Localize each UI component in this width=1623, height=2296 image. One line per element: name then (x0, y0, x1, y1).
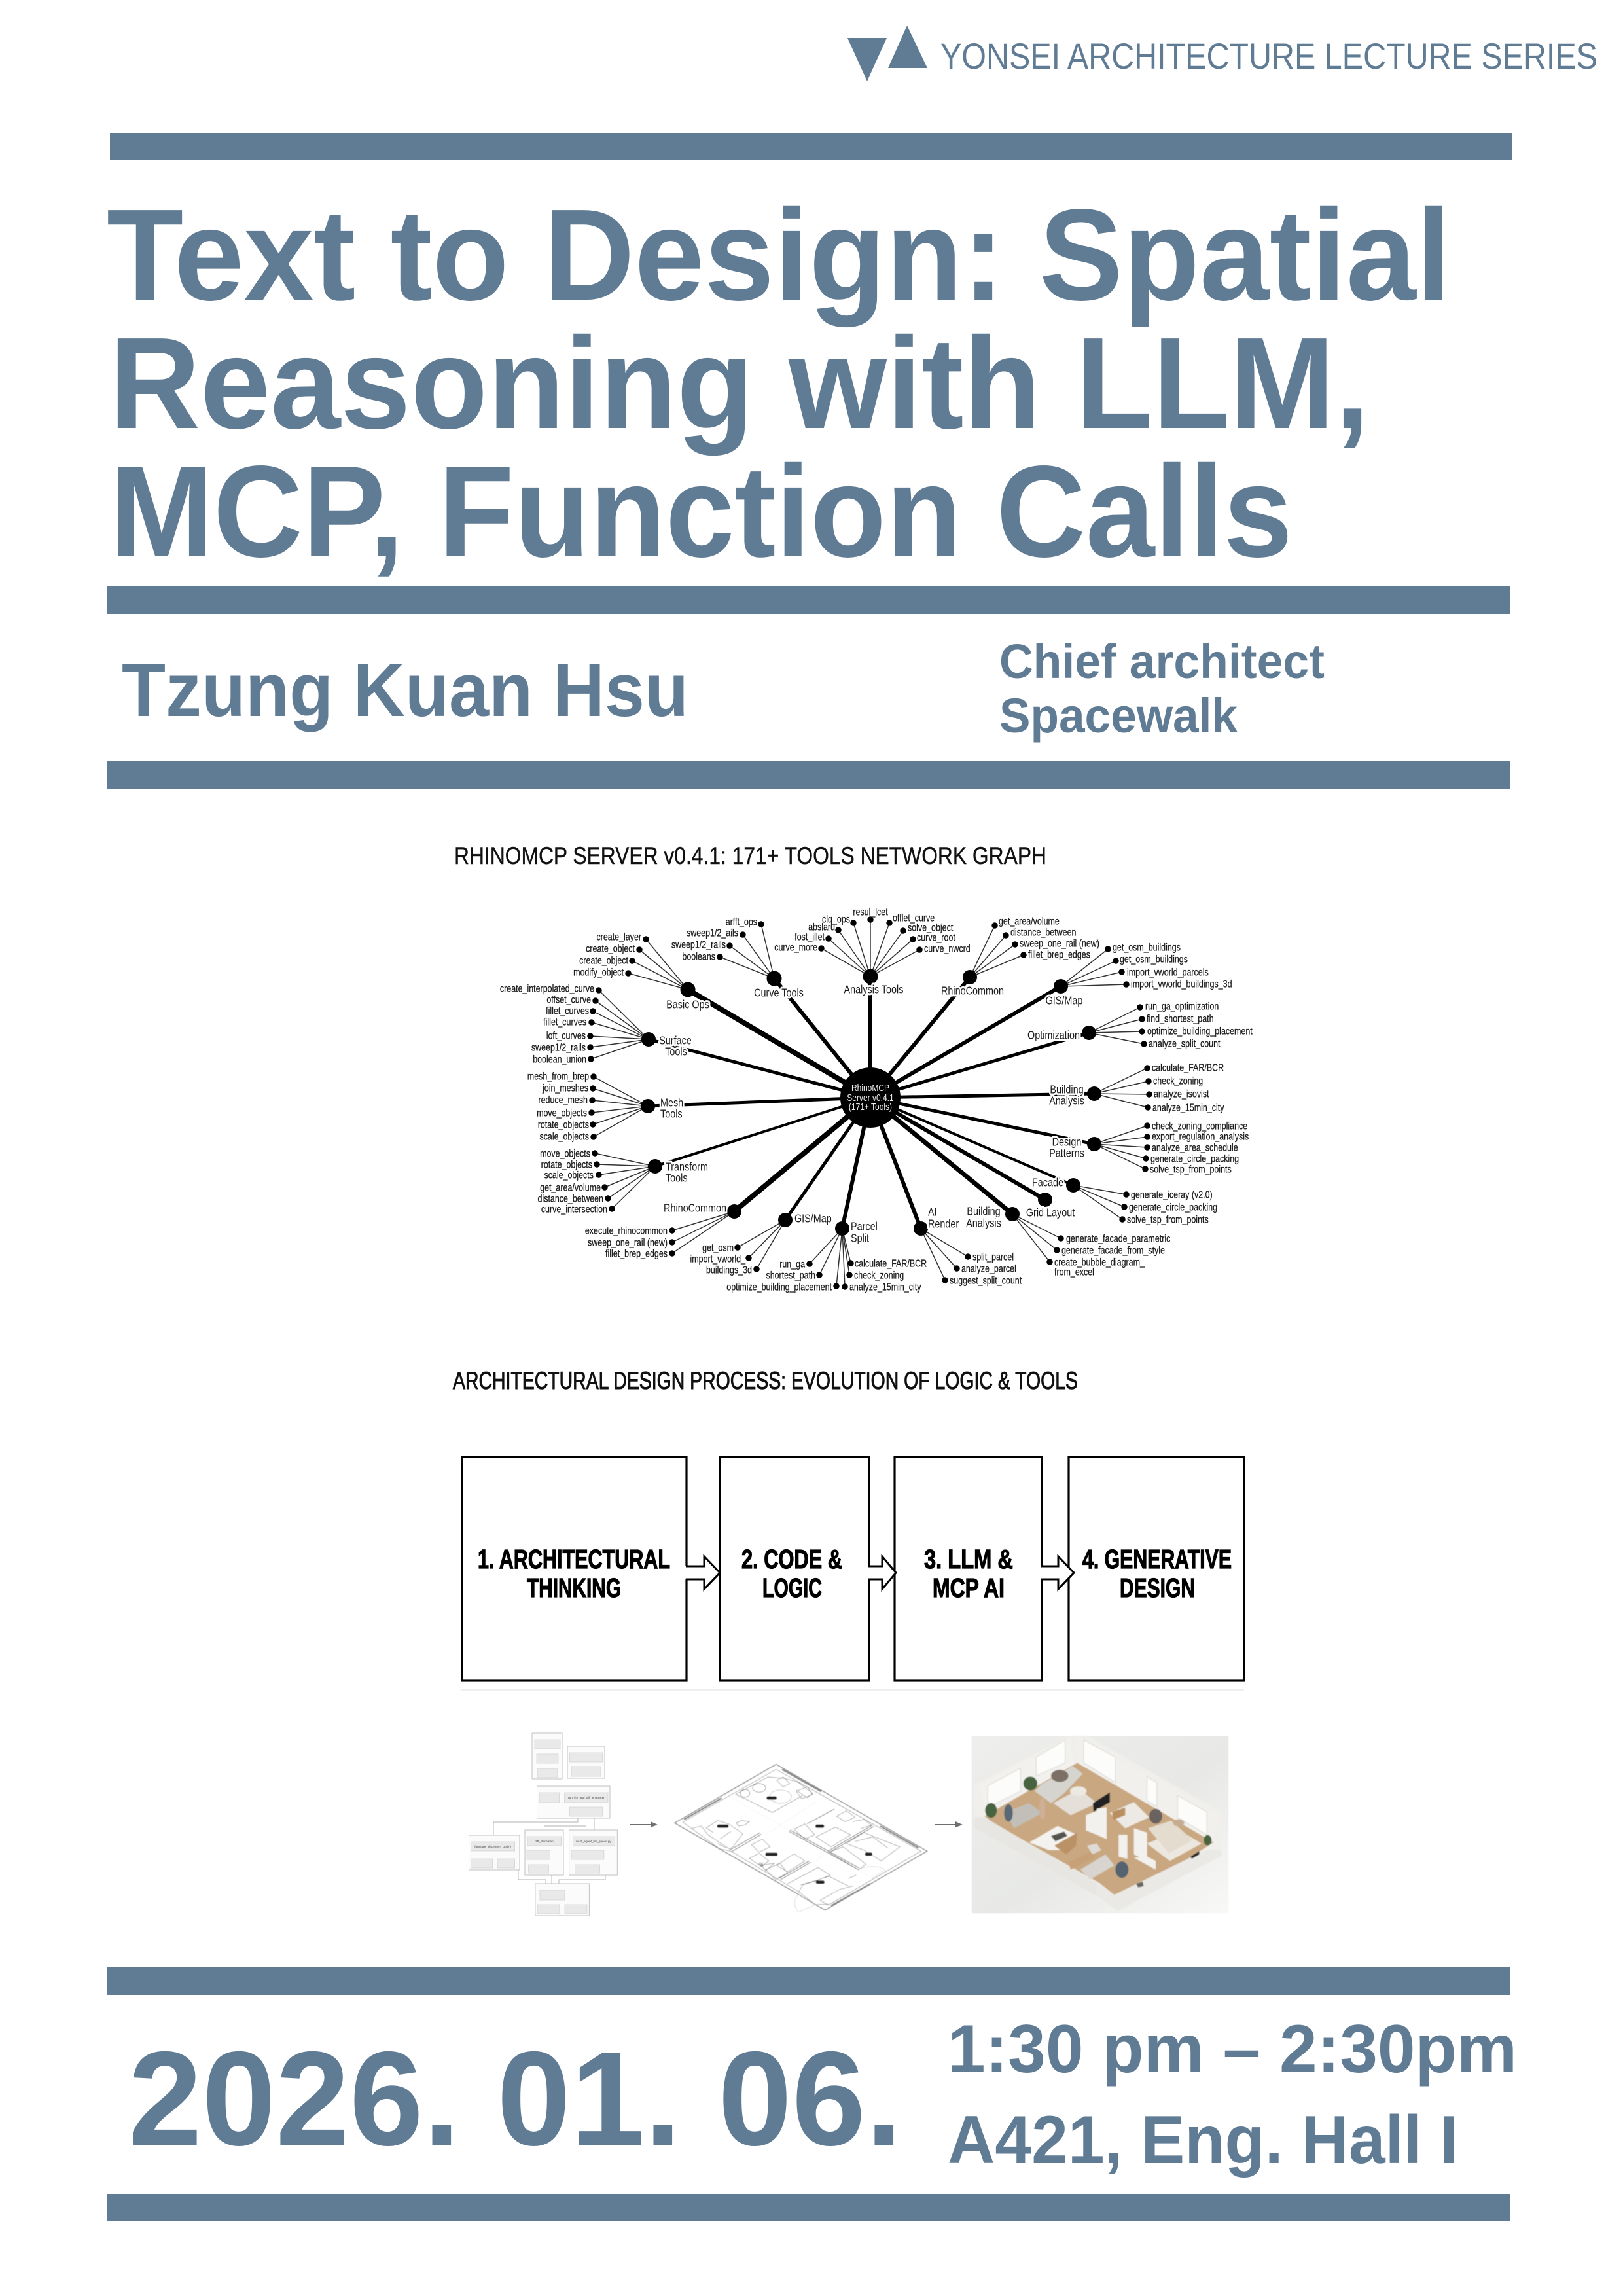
cluster: RhinoCommon top: get_area/volume (999, 915, 1060, 927)
flow panel: LLM (569, 1830, 617, 1875)
cluster: Facade: generate_circle_packing (1129, 1201, 1217, 1213)
cluster: Building Analysis bottom: generate_facade_parametric (1066, 1232, 1170, 1244)
cluster: Parcel Split: run_ga (779, 1258, 805, 1270)
flow panel: output (535, 1884, 589, 1916)
cluster: Analysis Tools: solve_object (908, 922, 953, 933)
bar under speaker (107, 761, 1510, 789)
cluster: Building Analysis right: analyze_15min_city (1152, 1102, 1224, 1113)
cluster: Optimization: optimize_building_placement (1147, 1025, 1253, 1037)
cluster: GIS/Map bottom: GIS/Map (794, 1212, 832, 1225)
cluster: Basic Ops: create_object (579, 954, 628, 966)
cluster: RhinoCommon bottom: RhinoCommon (664, 1202, 726, 1215)
time and venue (948, 2011, 1517, 2178)
bar under title (107, 586, 1510, 614)
cluster: Design Patterns: solve_tsp_from_points (1150, 1163, 1232, 1175)
flow panel: differential placement (525, 1830, 563, 1875)
render living area (1053, 1789, 1097, 1815)
title: Text to Design: Spatial (107, 183, 1451, 328)
flow panel: preprocessing (532, 1733, 562, 1779)
title: Reasoning with LLM, (109, 311, 1370, 456)
cluster: Surface Tools: fillet_curves (543, 1016, 586, 1028)
cluster: Design Patterns: Patterns (1049, 1147, 1084, 1160)
cluster: RhinoCommon top: fillet_brep_edges (1028, 948, 1090, 960)
cluster: Curve Tools: booleans (682, 950, 715, 962)
cluster: Surface Tools: Tools (665, 1045, 687, 1058)
cluster: AI Render (914, 1206, 1022, 1286)
cluster: Design Patterns (1049, 1120, 1249, 1175)
cluster: RhinoCommon bottom: execute_rhinocommon (585, 1225, 668, 1236)
cluster: GIS/Map bottom (690, 1212, 832, 1276)
cluster: Mesh Tools: mesh_from_brep (527, 1070, 589, 1082)
speaker role (999, 634, 1325, 743)
isometric floor plan (675, 1765, 927, 1912)
cluster: Mesh Tools: join_meshes (542, 1082, 588, 1094)
cluster: Optimization: run_ga_optimization (1145, 1000, 1219, 1012)
cluster: Basic Ops: create_object (586, 942, 635, 954)
cluster: Building Analysis right: analyze_isovist (1154, 1088, 1209, 1100)
cluster: Transform Tools: Tools (666, 1172, 688, 1185)
step 4 box: 4. GENERATIVE (1082, 1544, 1232, 1574)
cluster: Mesh Tools: reduce_mesh (538, 1094, 588, 1105)
cluster: Building Analysis right (1049, 1062, 1224, 1113)
render dining area (1006, 1803, 1043, 1828)
render background (972, 1736, 1228, 1913)
cluster: Surface Tools: Surface (659, 1034, 692, 1047)
cluster: Basic Ops (573, 931, 709, 1011)
cluster: Parcel Split: calculate_FAR/BCR (855, 1257, 927, 1269)
cluster: AI Render: split_parcel (972, 1251, 1014, 1263)
cluster: RhinoCommon bottom: sweep_one_rail (new) (588, 1236, 668, 1248)
flow panel: user input (567, 1746, 605, 1778)
cluster: Surface Tools: fillet_curves (546, 1005, 589, 1016)
cluster: Basic Ops: create_layer (596, 931, 641, 942)
title: MCP, Function Calls (110, 439, 1293, 584)
cluster: GIS/Map top: import_vworld_buildings_3d (1131, 978, 1232, 990)
cluster: Facade: solve_tsp_from_points (1127, 1213, 1209, 1225)
cluster: RhinoCommon top (941, 915, 1099, 997)
plan living furniture (736, 1777, 813, 1812)
cluster: Analysis Tools: offlet_curve (893, 912, 935, 924)
cluster: Curve Tools: Curve Tools (754, 986, 804, 999)
plan window hatches (684, 1769, 918, 1906)
rendered isometric apartment (972, 1736, 1228, 1913)
cluster: Parcel Split: optimize_building_placement (726, 1281, 832, 1293)
cluster: GIS/Map bottom: buildings_3d (706, 1264, 752, 1276)
cluster: Analysis Tools: Analysis Tools (844, 983, 903, 996)
cluster: RhinoCommon top: RhinoCommon (941, 984, 1004, 997)
cluster: RhinoCommon bottom: fillet_brep_edges (605, 1247, 668, 1259)
flowchart thumbnail (469, 1733, 617, 1916)
render building shell (974, 1736, 1223, 1911)
cluster: GIS/Map top: GIS/Map (1046, 994, 1082, 1007)
flow panel: differential placement: diff_placement (535, 1840, 555, 1843)
plan entry door (794, 1867, 885, 1912)
cluster: RhinoCommon bottom (585, 1202, 741, 1259)
arrow step 3 to 4 (1040, 1556, 1074, 1589)
cluster: Building Analysis right: calculate_FAR/BCR (1152, 1062, 1224, 1073)
central hub: Server v0.4.1 (847, 1092, 894, 1103)
arrow step 1 to 2 (685, 1556, 720, 1589)
cluster: Building Analysis bottom (966, 1205, 1170, 1278)
cluster: Design Patterns: analyze_area_schedule (1152, 1141, 1238, 1153)
header: lecture series logo and name (847, 26, 1597, 81)
cluster: Building Analysis bottom: generate_facade_from_style (1061, 1244, 1165, 1256)
cluster: Transform Tools: rotate_objects (541, 1158, 592, 1170)
cluster: GIS/Map top: import_vworld_parcels (1127, 966, 1209, 978)
cluster: RhinoCommon top: distance_between (1010, 926, 1076, 938)
cluster: Facade: generate_iceray (v2.0) (1131, 1189, 1213, 1200)
cluster: AI Render: AI (928, 1206, 937, 1219)
cluster: Transform Tools: move_objects (540, 1147, 590, 1159)
cluster: Analysis Tools: curve_root (917, 931, 955, 943)
step 4 box (1069, 1457, 1244, 1681)
cluster: Building Analysis bottom: Analysis (966, 1217, 1001, 1230)
step 1 box (462, 1457, 687, 1681)
cluster: Transform Tools: Transform (666, 1160, 708, 1174)
flow panel: routing: run_llm_and_diff_enhancer (568, 1796, 605, 1799)
arrow: plan to render (935, 1821, 963, 1827)
render back walls (978, 1739, 1075, 1813)
flow panel: LLM: multi_agent_llm_queue.py (576, 1840, 612, 1843)
cluster: Surface Tools (500, 982, 692, 1065)
cluster: Transform Tools: get_area/volume (540, 1181, 601, 1193)
cluster: RhinoCommon top: sweep_one_rail (new) (1020, 937, 1099, 949)
cluster: Optimization (1027, 1000, 1253, 1049)
cluster: Basic Ops: modify_object (573, 966, 624, 978)
cluster: GIS/Map bottom: get_osm (702, 1242, 734, 1253)
cluster: Grid Layout: Grid Layout (1026, 1206, 1075, 1219)
bar above date (107, 1967, 1510, 1995)
cluster: Surface Tools: offset_curve (546, 994, 591, 1005)
cluster: Building Analysis bottom: from_excel (1054, 1266, 1094, 1278)
cluster: Mesh Tools: Tools (660, 1107, 683, 1121)
step 3 box: 3. LLM & (924, 1544, 1013, 1574)
render windows (988, 1740, 1207, 1835)
cluster: Parcel Split: analyze_15min_city (849, 1281, 921, 1293)
central hub (840, 1067, 901, 1128)
cluster: Building Analysis right: check_zoning (1153, 1075, 1203, 1086)
render bedroom (1147, 1831, 1202, 1861)
step 1 box: 1. ARCHITECTURAL (478, 1544, 670, 1574)
cluster: Transform Tools (538, 1147, 708, 1215)
connectors (482, 1749, 605, 1905)
step 2 box (720, 1457, 869, 1681)
cluster: Optimization: analyze_split_count (1149, 1037, 1221, 1049)
cluster: Optimization: find_shortest_path (1147, 1013, 1214, 1024)
flow panel: routing (537, 1786, 610, 1818)
cluster: Mesh Tools: rotate_objects (538, 1119, 589, 1130)
render front walls (974, 1818, 1097, 1896)
cluster: Design Patterns: Design (1052, 1136, 1081, 1149)
cluster: Grid Layout (1026, 1193, 1075, 1219)
cluster: Mesh Tools: Mesh (660, 1096, 683, 1109)
cluster: GIS/Map bottom: import_vworld_ (690, 1253, 745, 1265)
render plants (985, 1776, 1211, 1846)
cluster: Mesh Tools (527, 1070, 683, 1142)
cluster: Parcel Split: check_zoning (854, 1269, 904, 1281)
plan outer walls (675, 1765, 927, 1910)
cluster: Building Analysis right: Building (1050, 1083, 1084, 1096)
cluster: Building Analysis right: Analysis (1049, 1094, 1084, 1107)
time and venue: 1:30 pm – 2:30pm (948, 2011, 1517, 2087)
cluster: Parcel Split (726, 1220, 927, 1293)
cluster: Parcel Split: Parcel (851, 1220, 878, 1233)
arrow: flowchart to plan (630, 1821, 658, 1827)
top bar (110, 133, 1512, 160)
step 2 box: 2. CODE & (741, 1544, 842, 1574)
render bath and partitions (1110, 1802, 1149, 1828)
flow panel: furniture (469, 1835, 520, 1870)
speaker name: Tzung Kuan Hsu (122, 647, 688, 732)
cluster: AI Render: suggest_split_count (950, 1274, 1022, 1286)
cluster: Optimization: Optimization (1027, 1029, 1080, 1042)
cluster: Mesh Tools: scale_objects (539, 1130, 589, 1142)
cluster: Basic Ops: Basic Ops (666, 998, 709, 1011)
cluster: Surface Tools: create_interpolated_curve (500, 982, 594, 994)
cluster: Analysis Tools: curve_nwcrd (924, 942, 971, 954)
step 2 box: LOGIC (762, 1573, 822, 1603)
date: 2026. 01. 06. (128, 2024, 902, 2174)
render kitchen (1029, 1826, 1077, 1850)
cluster: Analysis Tools: curve_more (774, 941, 817, 953)
title (107, 183, 1451, 584)
cluster: AI Render: Render (928, 1217, 959, 1230)
step 3 box: MCP AI (933, 1573, 1005, 1603)
flow panel: furniture: furniture_placement_optimi (474, 1845, 511, 1848)
cluster: Surface Tools: boolean_union (533, 1053, 586, 1065)
cluster: Building Analysis bottom: Building (967, 1205, 1001, 1218)
cluster: Curve Tools: arfft_ops (726, 916, 757, 927)
cluster: GIS/Map top: get_osm_buildings (1120, 953, 1188, 965)
cluster: Analysis Tools: abslaru (808, 921, 835, 933)
step 3 box (895, 1457, 1042, 1681)
process title: ARCHITECTURAL DESIGN PROCESS: EVOLUTION OF LOGIC & TOOLS (453, 1367, 1078, 1394)
central hub: (171+ Tools) (849, 1102, 892, 1112)
cluster: Design Patterns: export_regulation_analysis (1152, 1130, 1249, 1142)
plan kitchen (749, 1839, 805, 1880)
speaker role: Chief architect (999, 634, 1325, 689)
cluster: Design Patterns: check_zoning_compliance (1152, 1120, 1247, 1132)
plan bedroom and bath (794, 1811, 872, 1847)
cluster: Curve Tools: sweep1/2_ails (687, 927, 738, 939)
central hub: RhinoMCP (851, 1083, 889, 1093)
network graph panel (454, 842, 1253, 1293)
cluster: Analysis Tools: fost_illet (794, 931, 825, 942)
process panel (453, 1367, 1244, 1681)
cluster: Transform Tools: distance_between (538, 1193, 603, 1204)
cluster: Mesh Tools: move_objects (537, 1107, 587, 1119)
render wood floor (984, 1763, 1213, 1895)
plan room tags (717, 1797, 872, 1884)
cluster: GIS/Map top: get_osm_buildings (1113, 941, 1181, 953)
cluster: Parcel Split: shortest_path (766, 1269, 815, 1281)
cluster: AI Render: analyze_parcel (961, 1263, 1016, 1274)
cluster: Surface Tools: loft_curves (546, 1030, 586, 1041)
cluster: Design Patterns: generate_circle_packing (1150, 1153, 1239, 1164)
cluster: Curve Tools: sweep1/2_rails (671, 939, 726, 950)
cluster: Facade (1032, 1176, 1217, 1225)
render lower sofa and person (1080, 1854, 1115, 1880)
cluster: Building Analysis bottom: create_bubble_diagram_ (1054, 1256, 1145, 1268)
hub spokes (648, 977, 1094, 1229)
arrow step 2 to 3 (867, 1556, 896, 1589)
cluster: GIS/Map top (1046, 941, 1232, 1007)
plan walls (730, 1809, 874, 1880)
step 4 box: DESIGN (1120, 1573, 1195, 1603)
speaker role: Spacewalk (999, 689, 1238, 743)
plan dining furniture (692, 1821, 743, 1849)
cluster: Surface Tools: sweep1/2_rails (531, 1041, 586, 1053)
bottom bar (107, 2194, 1510, 2221)
cluster: Analysis Tools: resul_lcet (853, 906, 888, 918)
time and venue: A421, Eng. Hall I (948, 2102, 1458, 2178)
icon: double triangle logo (847, 26, 927, 81)
cluster: Analysis Tools (774, 906, 971, 996)
cluster: Transform Tools: scale_objects (544, 1169, 594, 1181)
cluster: Analysis Tools: clq_ops (822, 913, 850, 925)
cluster: Parcel Split: Split (851, 1232, 869, 1245)
network graph title: RHINOMCP SERVER v0.4.1: 171+ TOOLS NETWORK GRAPH (454, 842, 1046, 869)
cluster: Transform Tools: curve_intersection (541, 1203, 607, 1215)
cluster: Curve Tools (671, 916, 804, 999)
cluster: Facade: Facade (1032, 1176, 1063, 1189)
step 1 box: THINKING (527, 1573, 621, 1603)
